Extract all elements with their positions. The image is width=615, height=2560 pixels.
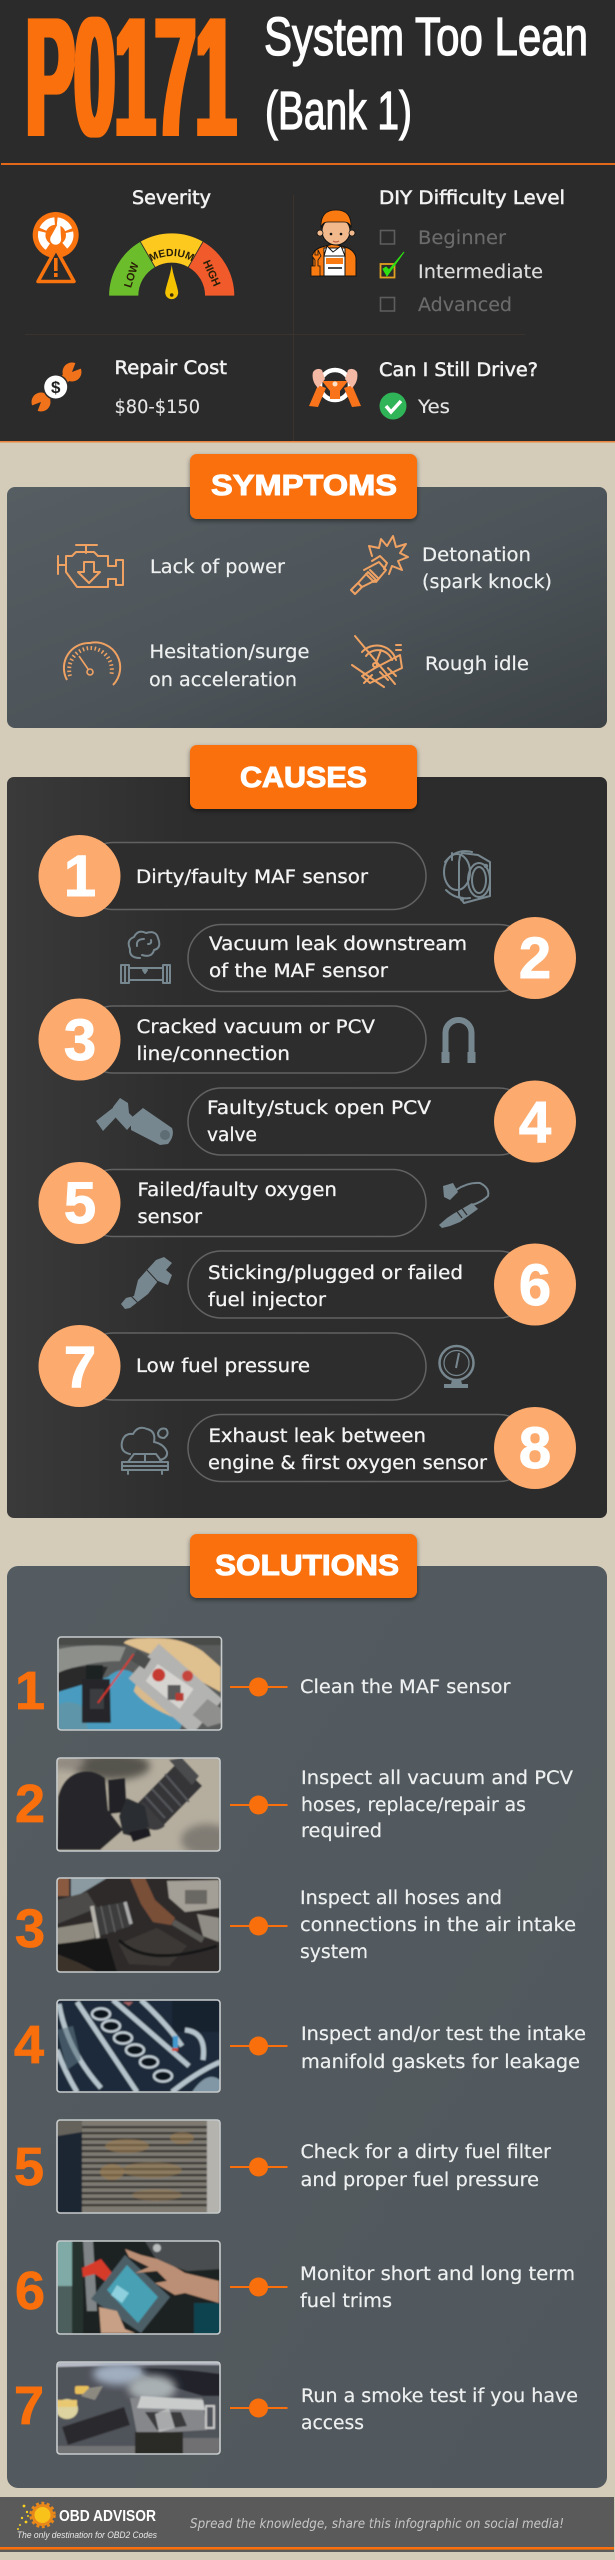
repair cost value: $80-$150 <box>114 397 200 418</box>
solution 2: Inspect all vacuum and PCV <box>301 1768 573 1789</box>
solution 3: Inspect all hoses and <box>300 1888 502 1909</box>
cause 1 <box>38 835 490 917</box>
symptom: hesitation: on acceleration <box>149 670 297 691</box>
solution 1: Clean the MAF sensor <box>300 1677 511 1698</box>
repair cost block <box>28 358 227 418</box>
checklist: difficulty options <box>380 228 543 316</box>
panel: header <box>0 0 615 442</box>
photo: dirty filter <box>57 2120 220 2213</box>
symptom: detonation: (spark knock) <box>422 572 552 593</box>
icon: MAF sensor <box>444 851 490 903</box>
cause 8: Exhaust leak between <box>208 1426 426 1447</box>
icon: rough idle <box>352 636 402 687</box>
solution 3 <box>15 1878 576 1972</box>
cause 2: Vacuum leak downstream <box>209 934 467 955</box>
cause 1: Dirty/faulty MAF sensor <box>136 867 368 888</box>
solution 4: manifold gaskets for leakage <box>301 2052 580 2073</box>
cause 3: Cracked vacuum or PCV <box>136 1017 375 1038</box>
title text: (Bank 1) <box>265 81 412 141</box>
solution 1: 1 <box>15 1661 45 1721</box>
cause 5: sensor <box>138 1207 202 1228</box>
photo: spraying MAF sensor <box>58 1637 222 1730</box>
DIY difficulty block <box>311 188 565 316</box>
cause 2: 2 <box>519 926 551 991</box>
icon: wrench with dollar coin: $ <box>51 378 61 397</box>
solution 7 <box>14 2362 578 2454</box>
icon: severity gauge warning <box>33 212 79 282</box>
icon: check engine <box>58 545 123 587</box>
icon: OBD Advisor logo <box>17 2503 54 2530</box>
cause 8 <box>122 1407 576 1489</box>
solution 6: fuel trims <box>300 2291 392 2312</box>
solution 7: Run a smoke test if you have <box>301 2386 578 2407</box>
solution 3: system <box>300 1942 368 1963</box>
cause 1: 1 <box>64 844 96 909</box>
cause 3: line/connection <box>136 1044 290 1065</box>
cause 3 <box>38 998 476 1080</box>
cause 6 <box>121 1244 576 1326</box>
icon: mechanic <box>311 210 356 276</box>
solution 4: Inspect and/or test the intake <box>301 2024 586 2045</box>
solution 1 <box>15 1637 511 1730</box>
severity gauge chart: HIGH <box>200 258 222 288</box>
solution 5: and proper fuel pressure <box>300 2170 539 2191</box>
photo: scan tool tablet <box>57 2241 220 2334</box>
solution 3: 3 <box>15 1899 45 1959</box>
panel: causes <box>7 745 607 1518</box>
footer <box>0 2497 614 2552</box>
cause 2: of the MAF sensor <box>209 961 388 982</box>
solution 2 <box>15 1752 573 1856</box>
heading: symptoms: SYMPTOMS <box>211 470 397 502</box>
solution 2: required <box>301 1821 382 1842</box>
symptom: hesitation: Hesitation/surge <box>150 642 310 663</box>
heading: solutions: SOLUTIONS <box>215 1550 399 1582</box>
heading: symptoms <box>190 454 417 519</box>
cause 6: Sticking/plugged or failed <box>208 1263 463 1284</box>
drive answer: Yes <box>417 397 450 418</box>
severity gauge chart: LOW <box>122 261 142 289</box>
solution 6: 6 <box>15 2261 45 2321</box>
cause 8: 8 <box>519 1416 551 1481</box>
solution 5: Check for a dirty fuel filter <box>300 2142 551 2163</box>
symptom: hesitation <box>149 642 310 691</box>
solution 4: 4 <box>14 2015 44 2075</box>
solution 6 <box>15 2241 575 2334</box>
symptom: rough idle: Rough idle <box>425 654 529 675</box>
severity gauge chart <box>109 233 234 300</box>
icon: speedometer <box>64 642 120 685</box>
checklist: difficulty options: Advanced <box>418 295 512 316</box>
checklist: difficulty options: Beginner <box>418 228 506 249</box>
cause 4: 4 <box>519 1090 551 1155</box>
icon: steering wheel with hands <box>309 369 361 407</box>
checklist: difficulty options: Intermediate <box>418 262 543 283</box>
solution 7: 7 <box>14 2376 44 2436</box>
title text <box>264 7 588 141</box>
photo: intake hose <box>49 1752 233 1856</box>
photo: intake manifold <box>57 2000 220 2092</box>
symptom: detonation: Detonation <box>422 545 531 566</box>
severity gauge chart: MEDIUM <box>148 248 194 261</box>
icon: pipe with steam <box>121 932 170 983</box>
panel: solutions <box>7 1534 607 2488</box>
icon: fuel injector <box>121 1257 172 1309</box>
photo: smoke test engine bay <box>56 2362 220 2454</box>
icon: spark plug detonation <box>351 536 408 594</box>
cause 7 <box>38 1325 474 1407</box>
icon: car with exhaust cloud <box>122 1428 168 1474</box>
logo wordmark: OBD ADVISOR <box>59 2508 156 2525</box>
solution 6: Monitor short and long term <box>300 2264 575 2285</box>
repair cost heading: Repair Cost <box>114 358 227 379</box>
solution 3: connections in the air intake <box>300 1915 576 1936</box>
logo tagline: The only destination for OBD2 Codes <box>17 2530 157 2541</box>
cause 8: engine & first oxygen sensor <box>208 1453 487 1474</box>
solution 2: hoses, replace/repair as <box>301 1795 526 1816</box>
footer message: Spread the knowledge, share this infographic on social media! <box>190 2517 564 2532</box>
cause 4: valve <box>207 1125 257 1146</box>
cause 6: fuel injector <box>208 1290 326 1311</box>
DIY heading: DIY Difficulty Level <box>379 188 565 209</box>
symptom: lack of power: Lack of power <box>150 557 285 578</box>
solution 5 <box>14 2120 551 2213</box>
severity block <box>32 188 234 300</box>
icon: wrench with dollar coin <box>28 359 85 415</box>
icon: pressure gauge <box>440 1346 474 1388</box>
severity heading: Severity <box>132 188 211 209</box>
cause 5 <box>38 1162 488 1244</box>
can I still drive block <box>309 360 538 420</box>
heading: causes <box>190 745 417 809</box>
solution 5: 5 <box>14 2137 44 2197</box>
cause 7: Low fuel pressure <box>136 1356 310 1377</box>
icon: U hose <box>442 1020 476 1063</box>
solution 4 <box>14 2000 586 2092</box>
cause 4: Faulty/stuck open PCV <box>207 1098 431 1119</box>
icon: PCV valve <box>96 1098 173 1145</box>
icon: oxygen sensor <box>439 1183 488 1228</box>
cause 6: 6 <box>519 1253 551 1318</box>
symptom: detonation <box>422 545 552 593</box>
panel: symptoms <box>7 454 607 728</box>
icon: green check <box>380 392 406 420</box>
cause 5: Failed/faulty oxygen <box>138 1180 337 1201</box>
cause 7: 7 <box>64 1335 96 1400</box>
solution 7: access <box>301 2413 364 2434</box>
solution 2: 2 <box>15 1774 45 1834</box>
cause 4 <box>96 1080 576 1162</box>
cause 3: 3 <box>64 1008 96 1073</box>
photo: hand on engine hoses <box>57 1878 220 1972</box>
can I still drive heading: Can I Still Drive? <box>379 360 538 381</box>
heading: causes: CAUSES <box>240 762 367 794</box>
heading: solutions <box>190 1534 417 1598</box>
cause 2 <box>121 917 576 999</box>
cause 5: 5 <box>64 1171 96 1236</box>
